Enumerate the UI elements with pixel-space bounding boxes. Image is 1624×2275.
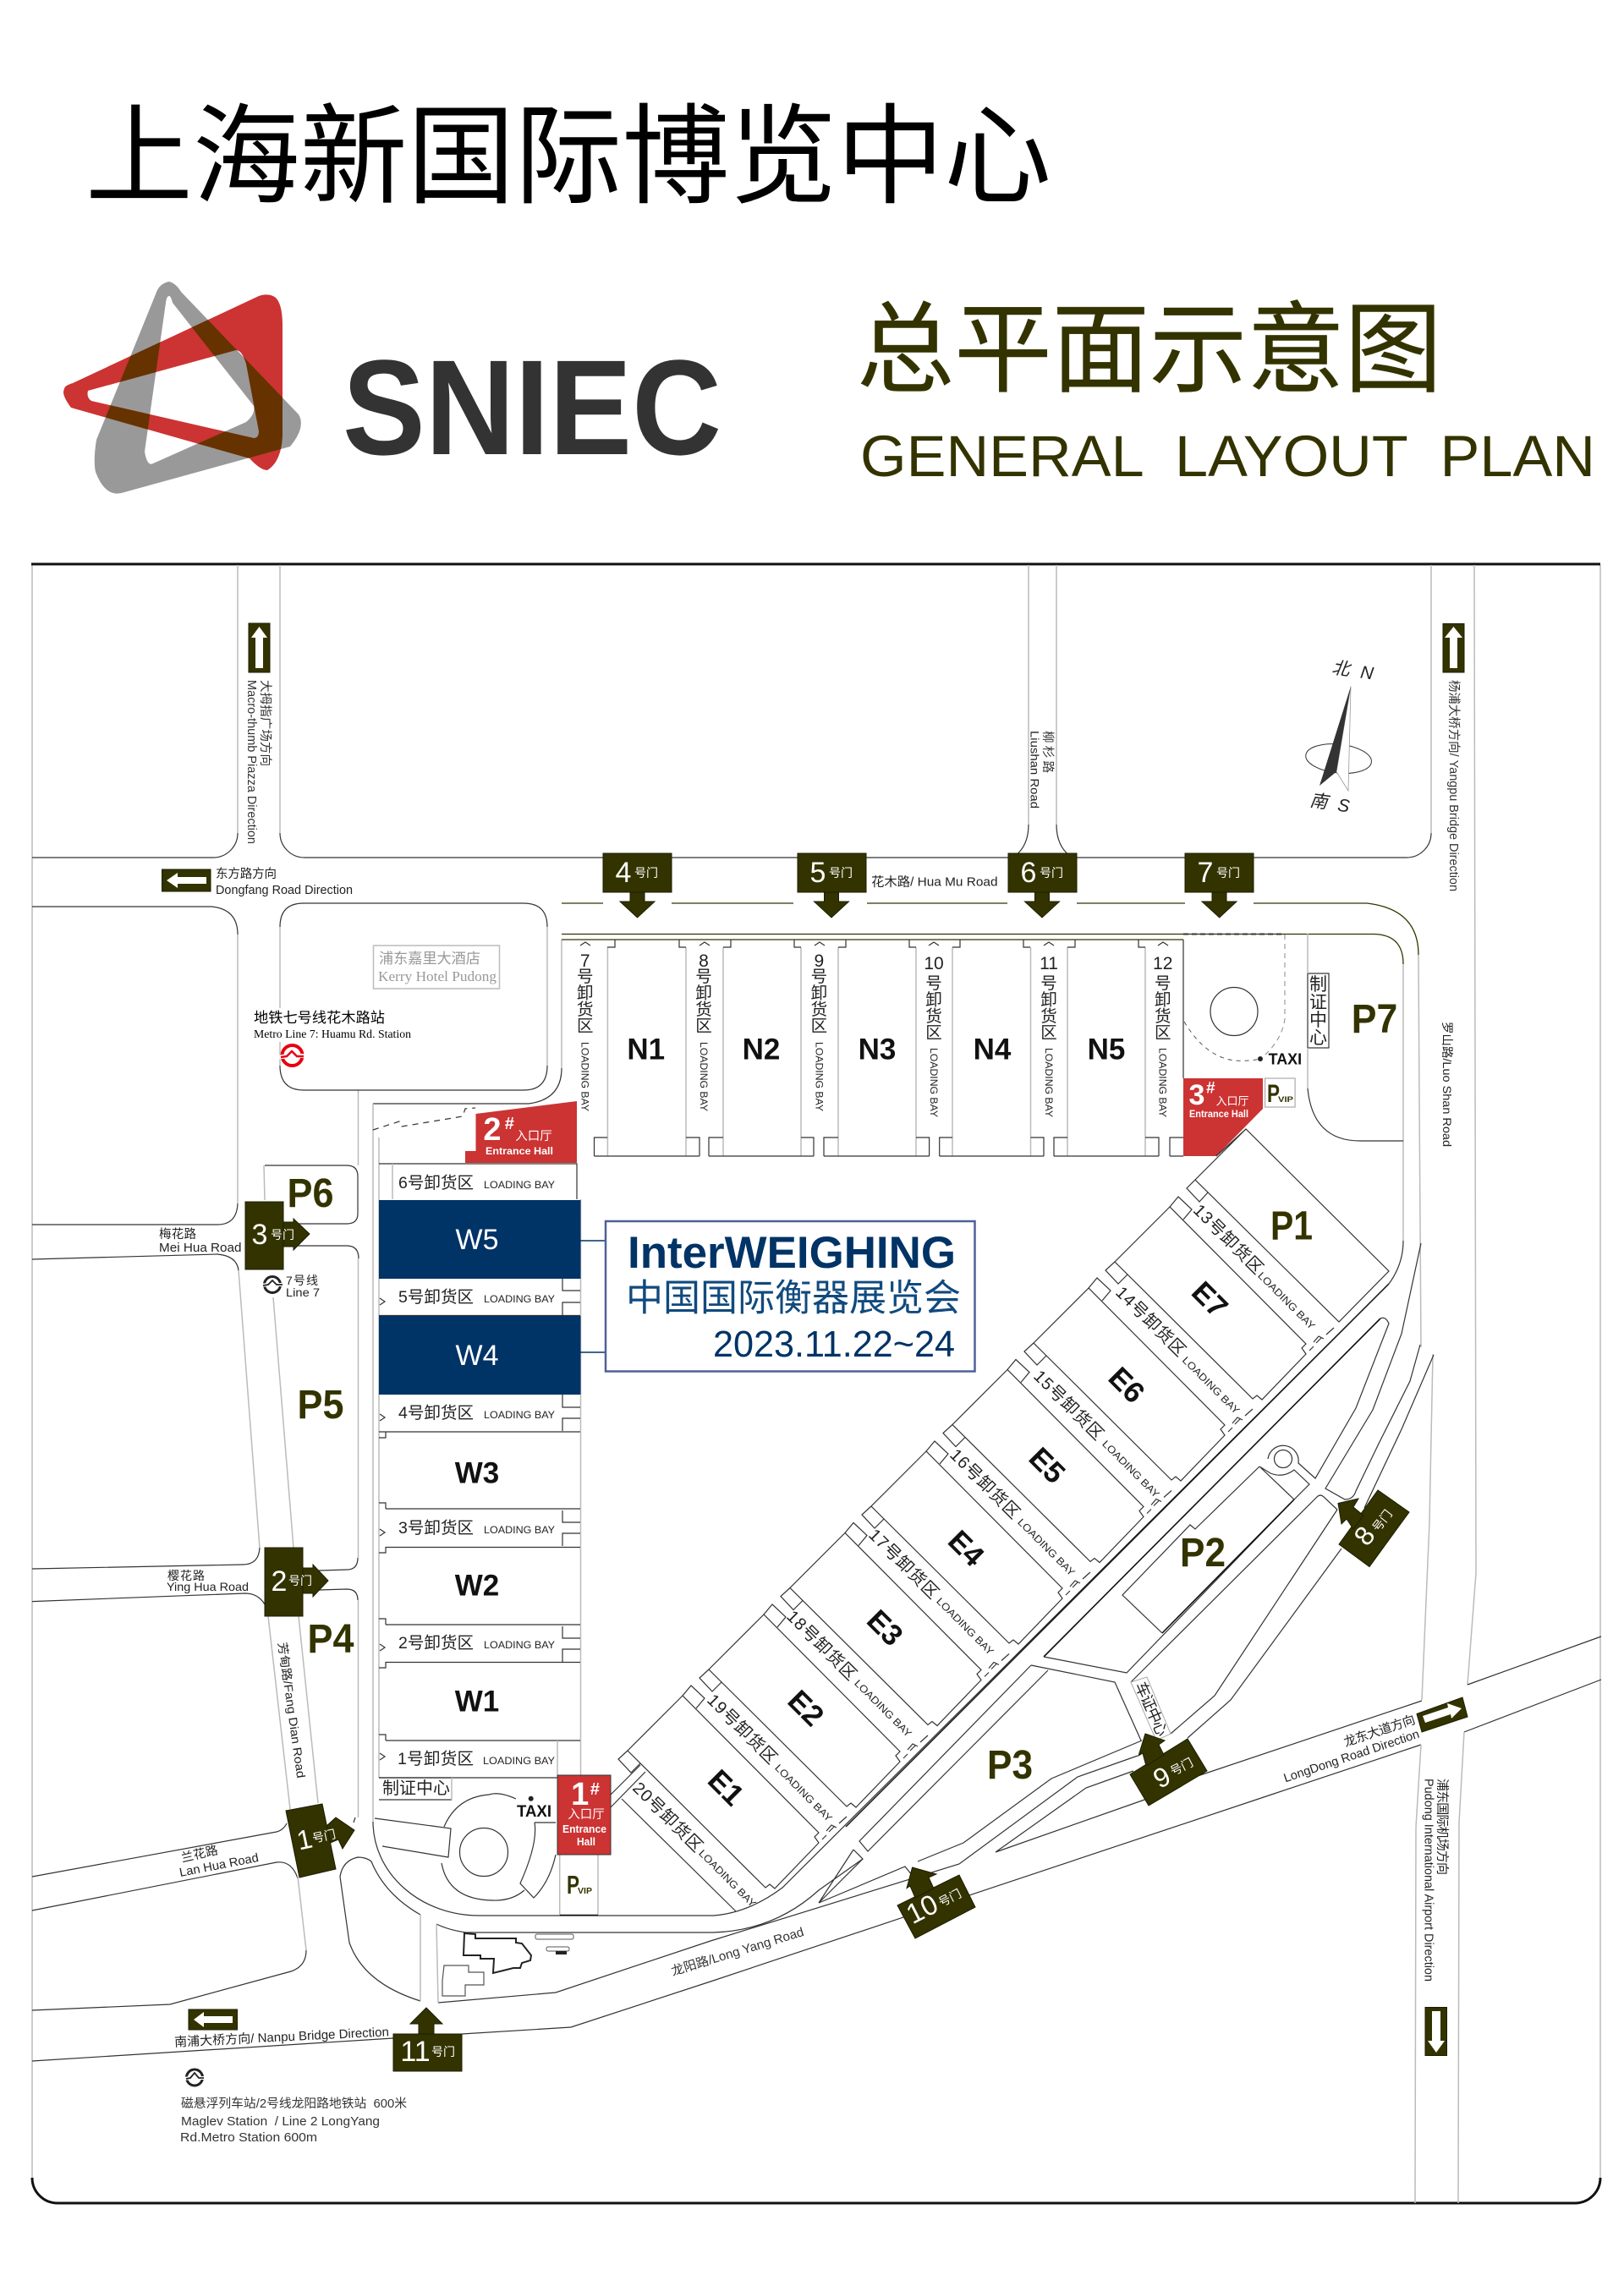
entrance hall 2: 入口厅 [515, 1130, 552, 1143]
label: Fang Dian Road: 芳甸路/Fang Dian Road [276, 1642, 308, 1779]
bay 9 label: LOADING BAY [813, 1042, 825, 1111]
label: accreditation centre east: 车证中心 [1132, 1680, 1171, 1739]
parking labels: P5 [298, 1383, 343, 1428]
label: Liushan Road: Liushan Road [1029, 731, 1042, 809]
label: Line 7 metro: 7号线 [286, 1274, 318, 1287]
gate 1: 号门 [311, 1827, 337, 1845]
bay 8 label: 8 [699, 951, 709, 971]
hall E2: 18号卸货区 [782, 1607, 860, 1685]
bay 12 label: 12 [1153, 954, 1172, 973]
label: Lan Hua Road: 兰花路 [180, 1843, 220, 1866]
icon: red metro logo [279, 1045, 307, 1066]
gate 6: 6 [1021, 857, 1036, 889]
hall W1: W1 [455, 1685, 499, 1719]
hall E7: LOADING BAY [1255, 1269, 1318, 1332]
label: Lan Hua Road: Lan Hua Road [178, 1851, 260, 1880]
bay 8 label [695, 951, 712, 1111]
hotel label: 浦东嘉里大酒店 [379, 950, 480, 967]
map frame [31, 564, 1600, 2203]
direction: Dongfang Road: Dongfang Road Direction [216, 884, 353, 897]
panel: P1 parking [1187, 1129, 1389, 1322]
direction: Macro-thumb Piazza: 大拇指广场方向 [258, 680, 272, 766]
hall E6: E6 [1102, 1361, 1151, 1410]
gate 11: 11 [400, 2036, 431, 2068]
gate 2: 号门 [288, 1574, 312, 1587]
hall E1: 19号卸货区 [703, 1691, 781, 1768]
bay 10 label [924, 954, 944, 1117]
gate 3 [245, 1202, 310, 1269]
bay 2 [380, 1625, 580, 1663]
entrance hall 1 [557, 1775, 611, 1855]
label: Line 7 metro: Line 7 [286, 1286, 320, 1299]
hall E4: E4 [941, 1524, 990, 1573]
bay 7 label: 7 [580, 951, 590, 971]
dashed forecourt line [373, 1108, 475, 1130]
icon: grey triangle [95, 282, 301, 494]
direction: Nanpu Bridge: 南浦大桥方向/ Nanpu Bridge Direction [174, 2025, 389, 2050]
bay 4: 4号卸货区 [398, 1404, 474, 1423]
label: Luo Shan Road: 罗山路/Luo Shan Road [1440, 1022, 1454, 1147]
ring road [562, 903, 1418, 955]
bay 5: 5号卸货区 [398, 1288, 474, 1307]
direction: Macro-thumb Piazza: Macro-thumb Piazza Direction [244, 680, 258, 844]
bay 2: 2号卸货区 [398, 1634, 474, 1653]
gate 4: 号门 [634, 866, 658, 880]
gate 3: 3 [252, 1219, 267, 1251]
note: Maglev station [180, 2069, 408, 2145]
label: Mei Hua Road [159, 1227, 242, 1255]
bay 2: LOADING BAY [484, 1639, 555, 1651]
icon: red triangle [63, 294, 283, 470]
entrance hall 1: Entrance [562, 1823, 606, 1835]
hall labels: N1 [627, 1033, 665, 1066]
hall W1 [379, 1662, 499, 1741]
gate 2: 2 [272, 1565, 287, 1598]
hall W2: W2 [455, 1570, 499, 1602]
bay 20 label: LOADING BAY [696, 1847, 759, 1910]
hall labels: N2 [743, 1033, 780, 1066]
label: Ying Hua Road: 樱花路 [167, 1569, 205, 1582]
hall E2: E2 [782, 1684, 830, 1733]
taxi label south: TAXI [517, 1803, 551, 1821]
hall E4: LOADING BAY [1015, 1516, 1078, 1578]
hall W4 [379, 1316, 580, 1395]
bay 7 label: LOADING BAY [579, 1042, 591, 1111]
VIP parking north [1265, 1078, 1295, 1108]
bay 12 label: LOADING BAY [1157, 1048, 1169, 1117]
heading: general layout plan [857, 294, 1595, 489]
wordmark: SNIEC [343, 332, 721, 483]
callout: InterWEIGHING exhibition: 中国国际衡器展览会 [626, 1277, 961, 1319]
note: Maglev station: Maglev Station / Line 2 LongYang [181, 2114, 380, 2129]
label: Long Yang Road: 龙阳路/Long Yang Road [670, 1925, 805, 1979]
direction: Pudong Airport: 浦东国际机场方向 [1435, 1779, 1450, 1875]
bay 11 label: 号卸货区 [1040, 974, 1057, 1042]
chinese heading: 总平面示意图 [857, 294, 1442, 405]
entrance hall 2: # [504, 1115, 514, 1133]
bay 9 label [811, 951, 827, 1111]
VIP parking south: P [567, 1870, 579, 1899]
bay 12 label: 号卸货区 [1155, 974, 1171, 1042]
gate 1: 1 [294, 1823, 315, 1856]
bay 5 [379, 1279, 580, 1316]
note: Maglev station: Rd.Metro Station 600m [180, 2130, 317, 2145]
accreditation centre: 制证中心 [1309, 975, 1327, 1048]
direction: Dongfang Road: 东方路方向 [216, 867, 277, 881]
accreditation centre south: 制证中心 [382, 1779, 450, 1798]
parking labels [288, 997, 1397, 1788]
bay 20 label [628, 1779, 759, 1910]
gate 10: 号门 [936, 1887, 963, 1909]
hall E5: E5 [1023, 1441, 1072, 1490]
hall E2: LOADING BAY [852, 1677, 914, 1740]
gate 11: 号门 [431, 2045, 455, 2058]
entrance hall 1: # [590, 1780, 600, 1799]
gate 1 [286, 1804, 354, 1878]
hall labels: N4 [974, 1033, 1012, 1066]
gate 7: 号门 [1216, 866, 1240, 880]
bay 20 label: 20号卸货区 [628, 1779, 706, 1856]
gate 4 [603, 853, 672, 918]
direction: Pudong Airport: Pudong International Airport Direction [1421, 1779, 1436, 1982]
hall E6: LOADING BAY [1180, 1354, 1242, 1417]
callout: InterWEIGHING exhibition: InterWEIGHING [628, 1228, 956, 1278]
compass: 南 [1309, 791, 1331, 813]
gate 8 [1338, 1490, 1409, 1566]
panel: west halls W1-W5 [373, 1101, 580, 1778]
gate 5 [798, 853, 866, 918]
entrance hall 3: # [1206, 1079, 1215, 1098]
entrance hall 3: 入口厅 [1215, 1094, 1249, 1108]
label: Ying Hua Road [167, 1569, 249, 1593]
bay 3 [380, 1509, 580, 1548]
note: Maglev station: 磁悬浮列车站/2号线龙阳路地铁站 600米 [181, 2097, 408, 2111]
label: metro line 7 Huamu Rd station: 地铁七号线花木路站 [254, 1009, 385, 1026]
compass: N [1359, 663, 1375, 684]
bay 4: LOADING BAY [484, 1409, 555, 1421]
parking labels: P2 [1180, 1531, 1226, 1576]
gate 5: 5 [810, 857, 826, 889]
entrance hall 3: Entrance Hall [1189, 1110, 1248, 1120]
label: Liushan Road: 柳杉路 [1040, 731, 1055, 773]
label: metro line 7 Huamu Rd station [254, 1008, 414, 1042]
entrance hall 3: 3 [1189, 1079, 1204, 1111]
VIP parking north: P [1267, 1080, 1280, 1108]
hall E3: E3 [860, 1603, 909, 1653]
entrance 1 forecourt roads [354, 1817, 451, 1857]
panel: north halls N1-N5 [562, 940, 1183, 1156]
gate 3: 号门 [271, 1228, 294, 1242]
hall W2 [379, 1547, 499, 1625]
entrance hall 2: Entrance Hall [486, 1145, 553, 1157]
direction: Macro-thumb Piazza [244, 623, 272, 844]
label: Ying Hua Road: Ying Hua Road [167, 1580, 249, 1593]
bay 11 label [1040, 954, 1058, 1117]
bay 1 [379, 1741, 580, 1778]
bay 7 label [577, 951, 593, 1111]
bay 4 [379, 1395, 580, 1432]
bay 3: 3号卸货区 [398, 1519, 474, 1538]
gate 10 [897, 1867, 975, 1938]
parking labels: P3 [987, 1743, 1033, 1788]
hall E3 [781, 1522, 1009, 1725]
hall E2 [700, 1604, 928, 1807]
gate 7 [1185, 853, 1254, 918]
entrance hall 2: 2 [483, 1112, 502, 1148]
bay 3: LOADING BAY [484, 1524, 555, 1536]
parking labels: P7 [1352, 997, 1397, 1042]
bay 7 label: 号卸货区 [577, 968, 593, 1035]
taxi label: TAXI [1269, 1050, 1302, 1067]
VIP parking south: VIP [578, 1887, 592, 1896]
compass [1304, 658, 1375, 816]
direction: LongDong Road: 龙东大道方向 [1342, 1713, 1417, 1750]
bay 8 label: 号卸货区 [695, 968, 712, 1035]
label: Mei Hua Road: 梅花路 [159, 1227, 196, 1242]
parking lot outlines P4 P5 P6 [264, 1165, 359, 1600]
entrance hall 1: Hall [577, 1835, 595, 1848]
road network lines [32, 565, 1601, 2203]
hall E5: 15号卸货区 [1029, 1367, 1107, 1444]
entrance hall 3 [1183, 1078, 1263, 1156]
compass: 北 [1330, 658, 1353, 680]
parking labels: P6 [288, 1171, 333, 1216]
hall E1: LOADING BAY [772, 1762, 835, 1824]
buildings south-west [442, 1933, 573, 1996]
bay 9 label: 号卸货区 [811, 968, 827, 1035]
gate 8: 号门 [1369, 1507, 1395, 1534]
gate 5: 号门 [829, 866, 853, 880]
icon: triangle overlap [105, 320, 283, 458]
gate 6 [1008, 853, 1077, 918]
label: Mei Hua Road: Mei Hua Road [159, 1242, 242, 1255]
bay 8 label: LOADING BAY [698, 1042, 710, 1111]
entrance hall 1: 入口厅 [568, 1808, 605, 1822]
callout: InterWEIGHING exhibition: 2023.11.22~24 [713, 1324, 955, 1365]
bay 11 label: LOADING BAY [1043, 1048, 1055, 1117]
direction: Pudong Airport [1421, 1779, 1450, 2055]
title: venue name: 上海新国际博览中心 [85, 96, 1051, 218]
hall E6 [1024, 1278, 1253, 1481]
parking labels: P4 [308, 1617, 354, 1662]
gate 8: 8 [1347, 1521, 1381, 1551]
label: Hua Mu Road: 花木路/ Hua Mu Road [871, 874, 998, 890]
north-east forecourt with taxi rank [1183, 934, 1403, 1141]
VIP parking south [567, 1870, 592, 1899]
bay 5: LOADING BAY [484, 1293, 555, 1305]
hotel label: Kerry Hotel Pudong [378, 968, 497, 984]
logo: SNIEC triangles and wordmark [63, 282, 721, 494]
hall E7 [1106, 1197, 1334, 1400]
direction: Dongfang Road [162, 867, 353, 897]
gate 6: 号门 [1040, 866, 1063, 880]
hall E4 [862, 1441, 1090, 1644]
bay 9 label: 9 [815, 951, 824, 971]
label: Liushan Road [1029, 731, 1055, 809]
hall labels: N5 [1088, 1033, 1125, 1066]
bay 6: 6号卸货区 [398, 1174, 474, 1192]
compass: S [1336, 796, 1351, 816]
gate 9: 9 [1148, 1760, 1176, 1795]
entrance hall 1 area [379, 1775, 611, 1899]
bay 10 label: 号卸货区 [925, 974, 942, 1042]
gate 7: 7 [1198, 857, 1213, 889]
hall E4: 16号卸货区 [946, 1445, 1023, 1523]
direction: LongDong Road [1282, 1697, 1468, 1785]
hotel label [374, 946, 499, 989]
hall labels [627, 1033, 1125, 1066]
panel: P1 parking: P1 [1270, 1204, 1313, 1248]
bay 11 label: 11 [1040, 954, 1058, 973]
hall E3: 17号卸货区 [864, 1525, 942, 1603]
hall W3: W3 [455, 1456, 499, 1490]
bay 6: LOADING BAY [484, 1179, 555, 1191]
hall E7: E7 [1185, 1275, 1234, 1324]
callout: InterWEIGHING exhibition [580, 1221, 974, 1372]
gate 4: 4 [616, 857, 631, 889]
hall W5: W5 [455, 1224, 499, 1256]
direction: Nanpu Bridge [174, 2009, 389, 2050]
hall E7: 13号卸货区 [1189, 1200, 1267, 1278]
english heading: GENERAL LAYOUT PLAN [860, 424, 1595, 489]
bay 1: 1号卸货区 [398, 1750, 474, 1768]
hall E5 [943, 1360, 1171, 1563]
hall E1: E1 [701, 1763, 750, 1812]
hall W4: W4 [455, 1340, 499, 1372]
bay 10 label: 10 [924, 954, 944, 973]
hall E6: 14号卸货区 [1111, 1283, 1189, 1361]
label: metro line 7 Huamu Rd station: Metro Line 7: Huamu Rd. Station [254, 1028, 411, 1041]
hall E3: LOADING BAY [934, 1595, 996, 1658]
block: Kerry Hotel site [280, 903, 547, 1090]
hall labels: N3 [859, 1033, 896, 1066]
hall W5 [379, 1200, 580, 1279]
gate 2 [265, 1548, 328, 1616]
hall E5: LOADING BAY [1100, 1438, 1162, 1500]
bay 1: LOADING BAY [483, 1755, 555, 1767]
VIP parking north: VIP [1278, 1095, 1293, 1104]
direction: LongDong Road: LongDong Road Direction [1282, 1728, 1421, 1785]
direction: Yangpu Bridge: 杨浦大桥方向/ Yangpu Bridge Direction [1446, 680, 1461, 891]
gate 10: 10 [901, 1888, 943, 1930]
entrance hall 2 [465, 1101, 577, 1163]
direction: Yangpu Bridge [1443, 624, 1464, 891]
bay 10 label: LOADING BAY [928, 1048, 940, 1117]
label: Line 7 metro [261, 1274, 320, 1299]
bay 12 label [1153, 954, 1172, 1117]
gate 9 [1130, 1734, 1207, 1806]
hall E1 [618, 1686, 847, 1889]
entrance hall 1: 1 [571, 1777, 589, 1812]
gate 11 [393, 2008, 462, 2071]
hall W3 [379, 1432, 499, 1509]
bay 6 [379, 1164, 577, 1199]
gate 9: 号门 [1168, 1756, 1195, 1778]
traffic island near gate 1 [340, 1857, 420, 2001]
